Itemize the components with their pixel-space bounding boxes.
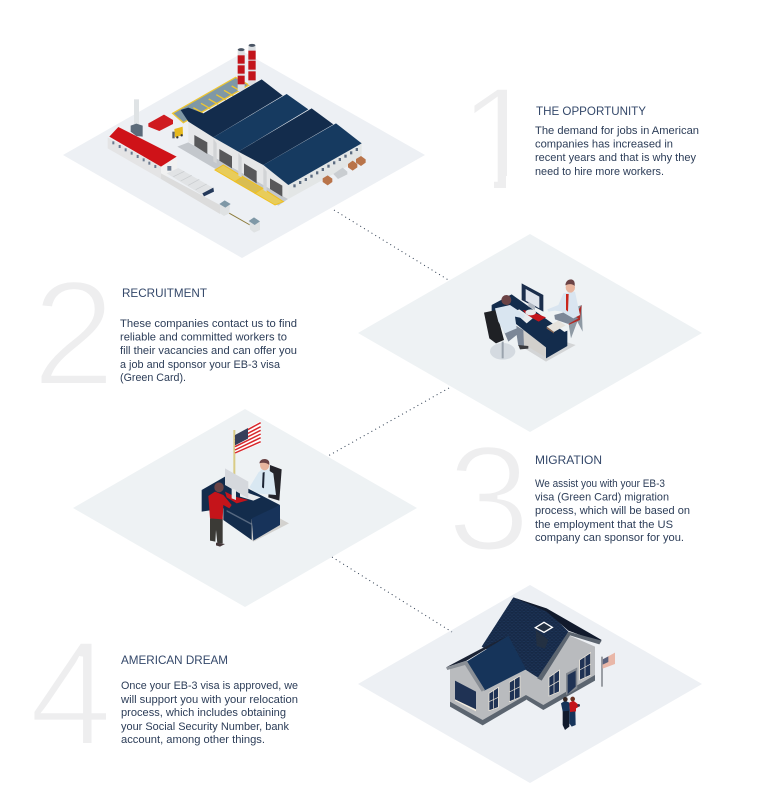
- text block: migration: MIGRATION: [535, 453, 602, 467]
- warehouse doors: [194, 135, 282, 197]
- desk modesty panel: [523, 328, 546, 357]
- seated agent and chair: [249, 459, 282, 501]
- text block: recruitment: (Green Card).: [120, 372, 186, 384]
- diamond: house base: [358, 585, 702, 783]
- text block: american dream: AMERICAN DREAM: [121, 653, 228, 667]
- text block: recruitment: [120, 286, 297, 384]
- windows: [489, 653, 591, 711]
- computer and papers: [225, 468, 261, 503]
- text block: migration: [535, 453, 690, 544]
- text block: the opportunity: The demand for jobs in American: [535, 125, 699, 137]
- text block: the opportunity: recent years and that is why they: [535, 152, 696, 164]
- monitor: [522, 283, 543, 312]
- text block: recruitment: RECRUITMENT: [122, 286, 208, 300]
- text block: the opportunity: companies has increased in: [535, 138, 673, 150]
- floor shadow: [177, 142, 288, 206]
- text block: the opportunity: need to hire more workers.: [535, 166, 664, 178]
- text block: migration: visa (Green Card) migration: [535, 492, 669, 504]
- red roof building: [108, 127, 177, 179]
- text block: recruitment: These companies contact us to find: [120, 318, 297, 330]
- desk shadow: [223, 517, 289, 542]
- text block: american dream: Once your EB-3 visa is approved, we: [121, 680, 298, 692]
- numeral 1: 1: [458, 55, 541, 223]
- dotted connector lines: [328, 210, 452, 632]
- text block: american dream: your Social Security Number, bank: [121, 721, 289, 733]
- text block: the opportunity: THE OPPORTUNITY: [536, 104, 646, 118]
- text block: migration: company can sponsor for you.: [535, 532, 684, 544]
- front door: [566, 667, 577, 695]
- floor shadow: [522, 328, 576, 362]
- yellow loading zones: [215, 165, 283, 205]
- red containers: [148, 115, 173, 131]
- main roof: [482, 597, 602, 681]
- delivery trucks: [167, 168, 214, 196]
- numeral 2: 2: [32, 249, 115, 417]
- person: seated employee: [547, 279, 583, 338]
- warehouse side windows: [293, 148, 358, 187]
- pallets and logs: [323, 156, 366, 185]
- forklift: [172, 127, 183, 138]
- illustration: visa agent: [202, 421, 289, 547]
- diamond: office base: [358, 234, 702, 432]
- guard houses and gate: [219, 200, 260, 233]
- diamond: factory base: [63, 52, 425, 258]
- text block: american dream: [120, 653, 298, 746]
- text block: migration: We assist you with your EB-3: [535, 478, 665, 490]
- side wing roof: [446, 636, 526, 692]
- warehouse walls: [188, 120, 362, 199]
- illustration: house: [446, 597, 615, 730]
- small chimney: [131, 99, 143, 137]
- US flag: [233, 421, 261, 477]
- text block: migration: process, which will be based on: [535, 505, 690, 517]
- smokestacks: [238, 44, 256, 91]
- illustration: factory: [108, 44, 366, 233]
- text block: american dream: account, among other things.: [121, 734, 265, 746]
- text block: american dream: process, which includes obtaining: [121, 707, 286, 719]
- skylight: [535, 622, 552, 649]
- text block: recruitment: reliable and committed workers to: [120, 332, 287, 344]
- illustration: office meeting: [484, 279, 583, 362]
- parking lot: [173, 77, 249, 123]
- text block: migration: the employment that the US: [535, 519, 673, 531]
- text block: recruitment: a job and sponsor your EB-3 visa: [120, 359, 281, 371]
- diamond: agent base: [73, 409, 417, 607]
- desk: [202, 477, 280, 541]
- couple with child: [561, 697, 580, 730]
- main wing walls: [526, 635, 595, 710]
- desk papers and red folder: [508, 305, 566, 333]
- person: standing client in red: [208, 482, 232, 547]
- numeral 3: 3: [447, 414, 530, 582]
- side wing walls: [450, 663, 526, 725]
- text block: recruitment: fill their vacancies and can offer you: [120, 345, 297, 357]
- person: seated client: [484, 295, 528, 360]
- numeral 4: 4: [29, 609, 112, 777]
- text block: the opportunity: [535, 104, 699, 178]
- warehouse roofs: [181, 79, 362, 185]
- flag: [601, 653, 615, 687]
- boundary wall: [161, 173, 220, 214]
- desk: [492, 294, 567, 358]
- text block: american dream: will support you with your relocation: [120, 694, 298, 706]
